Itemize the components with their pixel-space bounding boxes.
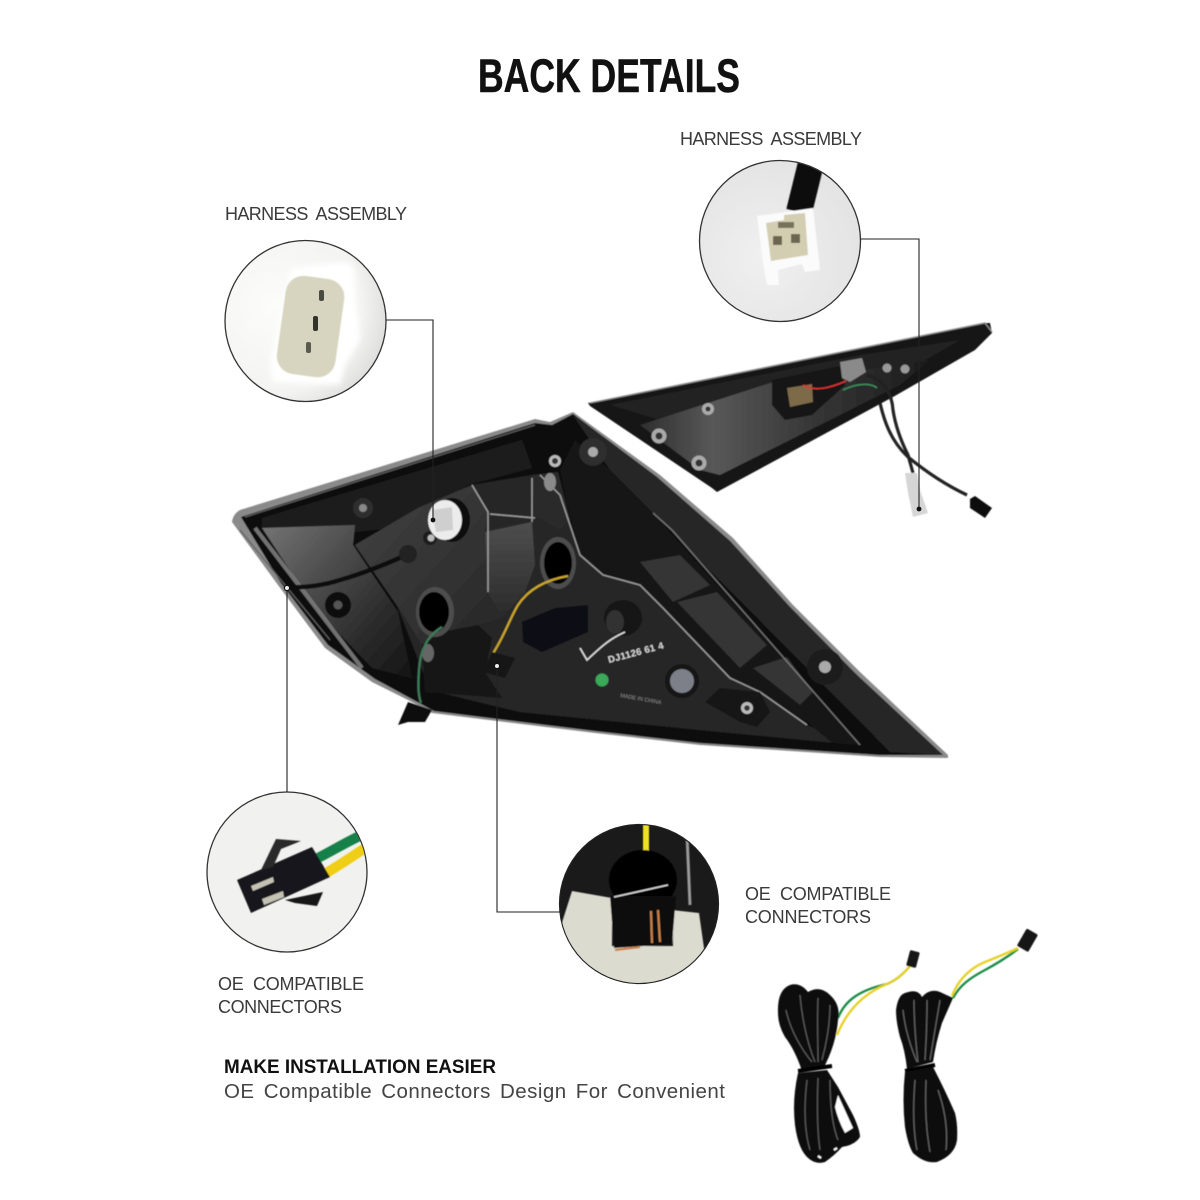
coiled extension cable: right	[896, 928, 1038, 1162]
pocket inner light strip	[255, 528, 362, 668]
lower coil	[904, 1067, 957, 1162]
yellow wire	[837, 966, 910, 1035]
white connector shell	[270, 262, 360, 385]
copper terminals	[615, 910, 660, 950]
yellow wire	[952, 948, 1018, 996]
white connector shell	[757, 208, 820, 285]
made in china mark: MADE IN CHINA	[620, 693, 662, 706]
white check wire	[580, 632, 625, 660]
yellow wire	[326, 845, 370, 873]
harness cables	[867, 375, 967, 495]
upper coil	[778, 984, 839, 1071]
small black plug	[1017, 928, 1038, 952]
text block: make installation easier	[224, 1057, 725, 1103]
yellow wire	[643, 823, 649, 852]
cap highlight	[614, 885, 668, 897]
small black plug	[906, 950, 920, 968]
right inner black strip	[560, 440, 860, 745]
red wire	[803, 381, 846, 389]
label: OE compatible connectors right	[745, 884, 891, 927]
green certification disc	[596, 674, 608, 686]
leader line: top-right circle to white connector	[860, 239, 921, 511]
lit mounting plate	[355, 485, 502, 645]
upper lamp shell	[588, 323, 992, 492]
green wire	[316, 834, 364, 859]
white end connector	[905, 473, 928, 517]
infographic canvas	[206, 58, 1038, 1164]
grommet	[399, 545, 417, 563]
black gasket plate	[772, 366, 845, 420]
coil tie	[905, 1065, 935, 1071]
label: OE compatible connectors left: CONNECTORS	[218, 997, 342, 1017]
circle detail: bottom-middle connector	[558, 823, 718, 990]
mount blob with nut	[705, 688, 770, 727]
circle frame	[700, 160, 860, 322]
circle detail: top-right harness connector	[700, 155, 860, 322]
bulb window	[787, 384, 813, 407]
bottom black lip	[430, 695, 880, 754]
upper lamp top highlight	[590, 323, 992, 403]
green wire	[843, 384, 877, 390]
label: OE compatible connectors left	[218, 974, 364, 1017]
label: harness assembly left: HARNESS ASSEMBLY	[225, 204, 407, 224]
label: OE compatible connectors right: CONNECTORS	[745, 907, 871, 927]
ribbed lens panels	[640, 555, 813, 705]
label: OE compatible connectors right: OE COMPATIBLE	[745, 884, 891, 904]
black plug connector	[522, 605, 588, 652]
rim highlights	[240, 425, 535, 640]
title: BACK DETAILS	[478, 49, 740, 102]
beige connector face	[274, 273, 347, 380]
black harness cable	[288, 554, 408, 587]
lower dark recess	[422, 625, 502, 698]
centre lit panel	[485, 522, 535, 618]
upper lamp inner band	[610, 340, 960, 420]
grey cable streak	[687, 835, 690, 905]
circle detail: bottom-left connector	[207, 792, 370, 952]
lower right housing	[355, 472, 857, 745]
black cable	[799, 155, 813, 212]
silver bracket	[840, 358, 866, 382]
circle frame	[560, 824, 718, 984]
glossy connector cap	[609, 849, 677, 897]
black connector body	[237, 847, 330, 913]
circle frame	[207, 792, 367, 952]
loop gap	[835, 1095, 853, 1133]
green wire	[838, 966, 910, 1018]
green wire	[418, 627, 442, 703]
cable highlights	[903, 1000, 947, 1152]
lower latch	[285, 892, 323, 906]
label: harness assembly right: HARNESS ASSEMBLY	[680, 129, 862, 149]
white bulb socket	[428, 498, 470, 542]
upper tail lamp back view	[588, 323, 992, 518]
leader line: top-left circle to socket	[386, 320, 435, 522]
lower-left tail lamp back view	[232, 412, 948, 758]
coil tie	[798, 1066, 832, 1071]
lamp dark interior	[241, 414, 943, 755]
label: OE compatible connectors left: OE COMPATIBLE	[218, 974, 364, 994]
white mount block	[562, 890, 705, 983]
beige connector face	[766, 213, 808, 261]
text block: make installation easier: MAKE INSTALLATION EASIER	[224, 1057, 496, 1078]
leader line: bottom-left circle to cable clip	[284, 585, 290, 792]
tail connector	[398, 702, 432, 725]
sockets	[416, 537, 642, 637]
leader line: bottom-middle circle to connector	[494, 663, 561, 912]
black end connector	[970, 496, 992, 518]
small coil gaps	[818, 1148, 837, 1158]
lamp outer rim	[232, 412, 948, 758]
upper centre panel	[488, 472, 570, 530]
green wire	[953, 949, 1018, 998]
text block: make installation easier: OE Compatible Connectors Design For Convenient	[224, 1080, 725, 1103]
grey plugs	[422, 473, 699, 698]
circle frame	[225, 240, 386, 402]
upper latch	[261, 839, 301, 870]
band strip highlight	[653, 513, 860, 745]
right outer band	[573, 415, 943, 755]
top band	[262, 440, 532, 532]
upper coil	[896, 991, 953, 1069]
moulded lamp code: DJ1126 61 4	[607, 640, 666, 666]
left pocket	[262, 525, 412, 678]
small connector at wire end	[483, 652, 515, 678]
silver terminals	[251, 877, 274, 891]
coiled extension cable: left	[778, 950, 920, 1163]
nuts	[652, 364, 910, 470]
yellow wire	[492, 576, 568, 655]
terminals	[773, 236, 782, 245]
bolts	[325, 438, 843, 685]
upper lamp inner pocket	[640, 360, 930, 475]
circle detail: top-left harness connector	[225, 240, 386, 402]
contact pins	[319, 290, 324, 301]
connector base	[610, 896, 676, 948]
housing highlight lines	[472, 475, 807, 725]
lower coil	[794, 1070, 860, 1163]
cable highlights	[786, 995, 838, 1150]
